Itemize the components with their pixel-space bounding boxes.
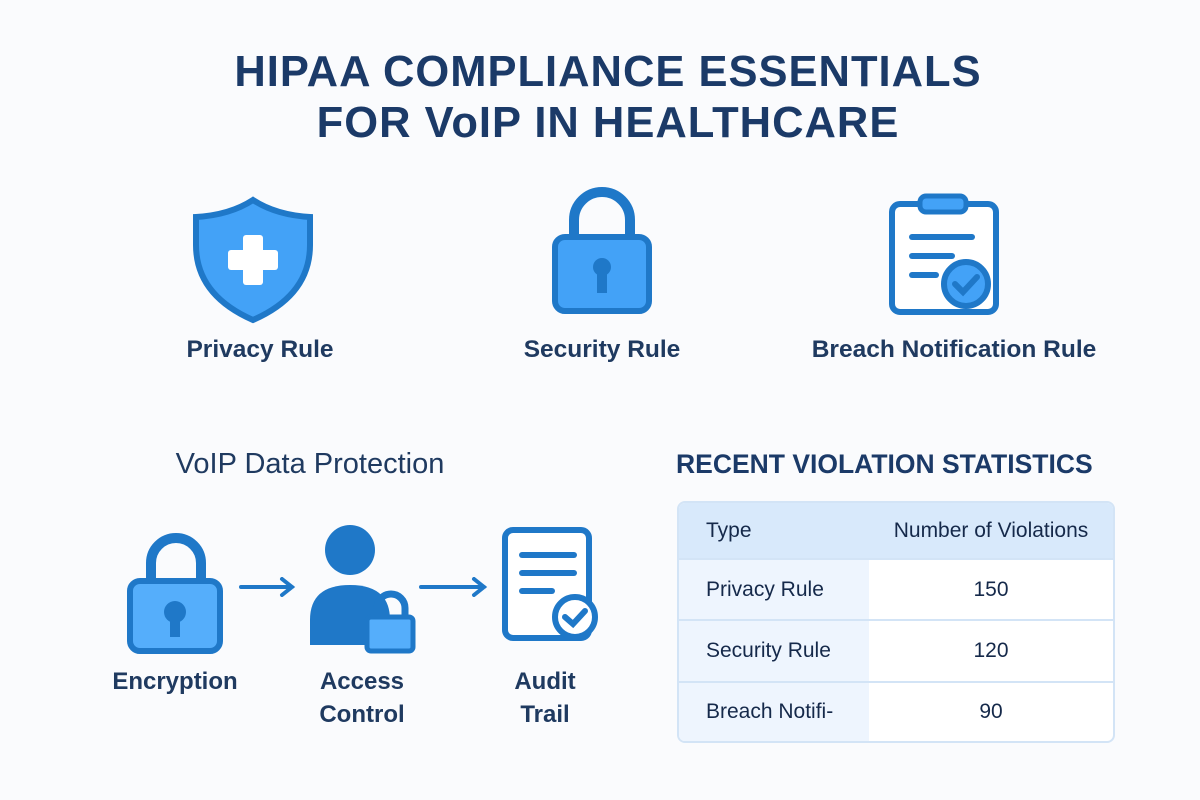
icon: shield: [193, 196, 313, 324]
table: violations: Security Rule: [706, 639, 831, 662]
label: Access Control: Access: [320, 668, 404, 695]
title: HIPAA COMPLIANCE ESSENTIALS: [234, 48, 982, 96]
icon: person with lock: [310, 525, 416, 654]
label: Breach Notification Rule: Breach Notification Rule: [812, 336, 1096, 363]
heading: VoIP Data Protection: VoIP Data Protection: [176, 448, 444, 480]
label: Encryption: Encryption: [112, 668, 238, 695]
title: [234, 48, 982, 147]
table: violations: Type: [706, 518, 752, 542]
arrow: [419, 577, 488, 597]
table: violations: 90: [979, 700, 1003, 723]
label: Access Control: [319, 668, 405, 728]
table: violations: Privacy Rule: [706, 578, 824, 601]
table: violations: [677, 501, 1115, 743]
table: violations: 150: [973, 578, 1009, 601]
icon: clipboard: [889, 194, 999, 315]
flow: data protection: [112, 525, 598, 728]
icon: encryption lock: [127, 533, 223, 654]
table: violations: 120: [973, 639, 1009, 662]
table: violations: Breach Notifi-: [706, 700, 833, 723]
heading: Recent Violation Statistics: RECENT VIOLATION STATISTICS: [676, 449, 1093, 479]
arrow: [239, 577, 296, 597]
icon: audit document: [502, 527, 598, 641]
icon: lock: [552, 187, 652, 314]
label: Audit Trail: [514, 668, 576, 728]
label: Privacy Rule: Privacy Rule: [186, 336, 334, 363]
label: Access Control: Control: [319, 701, 405, 728]
label: Security Rule: Security Rule: [524, 336, 680, 363]
table: violations: Number of Violations: [894, 518, 1088, 542]
title: FOR VoIP IN HEALTHCARE: [317, 99, 899, 147]
label: Audit Trail: Audit: [514, 668, 576, 695]
label: Audit Trail: Trail: [520, 701, 570, 728]
